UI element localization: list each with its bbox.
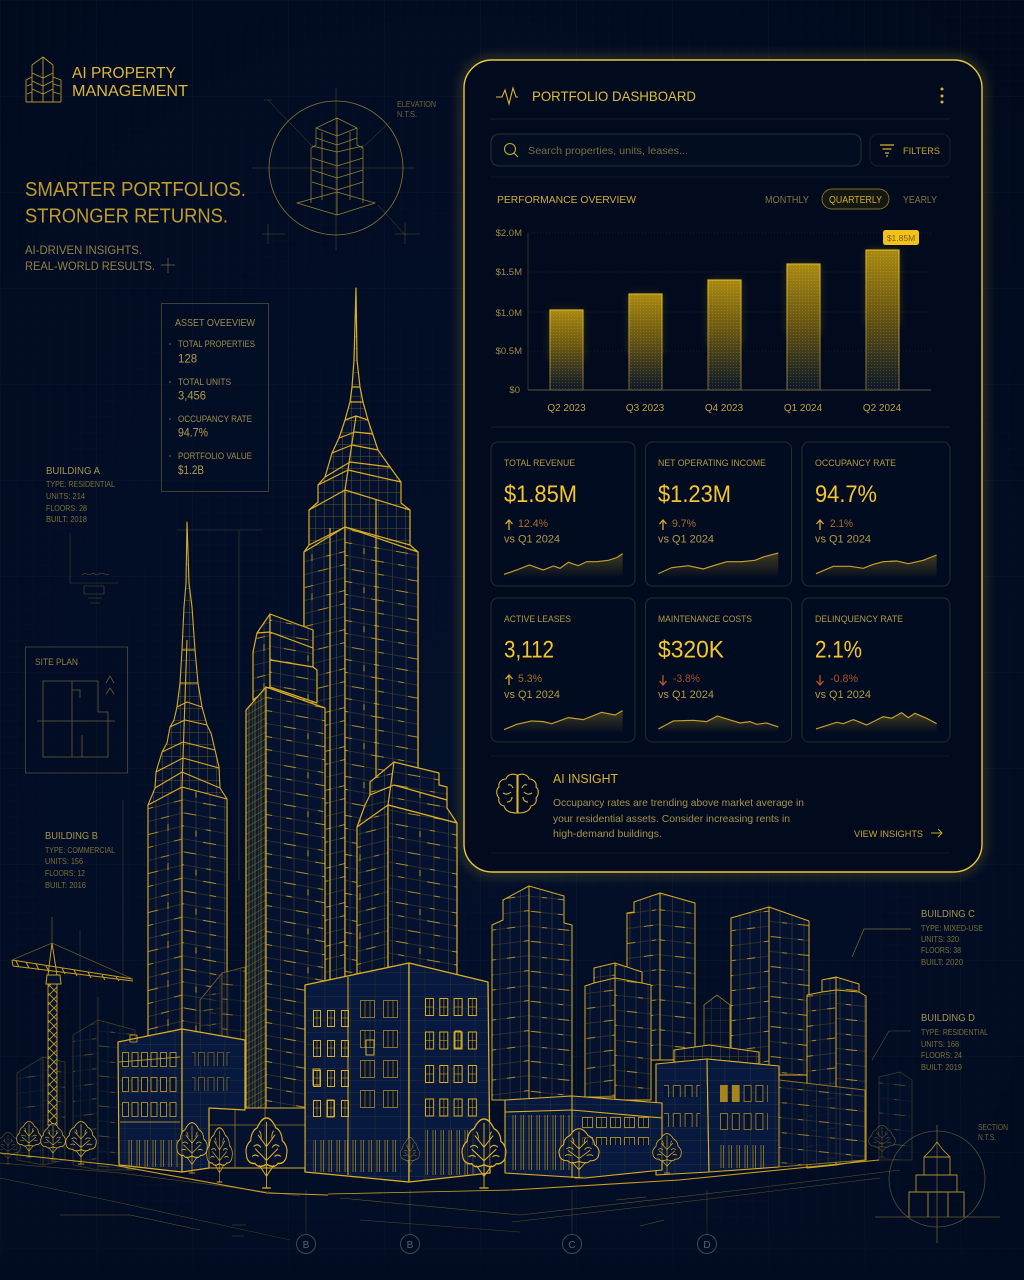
drafting guide lines [70,530,707,1234]
callout: building D: UNITS: 168 [921,1039,959,1049]
time range tabs: MONTHLY [765,195,809,206]
grid markers B B C D [296,1234,716,1254]
KPI card: total revenue: 12.4% [518,518,548,530]
building: low center block [305,963,490,1182]
panel: asset overview: TOTAL PROPERTIES [178,339,255,349]
AI insight section: AI INSIGHT [553,772,618,786]
KPI card: net operating income: NET OPERATING INCOME [658,458,766,469]
building: stepped sub tower [357,762,457,975]
KPI card: delinquency rate: -0.8% [830,673,858,685]
chart heading: PERFORMANCE OVERVIEW [497,194,636,206]
callout: building A: BUILDING A [46,465,100,477]
KPI card: maintenance costs: MAINTENANCE COSTS [658,614,752,625]
KPI card: total revenue: vs Q1 2024 [504,534,560,546]
KPI card: occupancy rate: OCCUPANCY RATE [815,458,896,469]
bar chart: Q2 2024 [863,403,902,414]
panel: asset overview [162,304,268,492]
AI insight section: Occupancy rates are trending above market average in [553,797,804,809]
logo wordmark: MANAGEMENT [72,83,188,100]
callout: building C: TYPE: MIXED-USE [921,923,983,933]
grid markers B B C D: B [303,1240,310,1251]
bottom fade [0,1215,1024,1280]
section label: SECTION [978,1123,1008,1132]
far left background buildings [17,997,135,1170]
KPI card: active leases: ACTIVE LEASES [504,614,571,625]
KPI card: total revenue: $1.85M [504,481,577,508]
KPI card: occupancy rate: 2.1% [830,518,853,530]
KPI card: maintenance costs: vs Q1 2024 [658,689,714,701]
time range tabs: QUARTERLY [829,195,882,206]
panel: site plan: SITE PLAN [35,657,78,667]
AI insight section [491,756,950,853]
bar chart: Q2 2023 [547,403,586,414]
building: main central tower [304,288,418,1000]
headline [25,179,246,228]
KPI card: delinquency rate [802,598,950,742]
far right faint building [879,1072,912,1160]
icon: construction crane [12,917,133,1125]
KPI card: delinquency rate: 2.1% [815,636,862,664]
bar chart [496,228,931,414]
callout: building C: FLOORS: 38 [921,945,961,955]
panel: asset overview: 128 [178,354,197,366]
callout: building A [46,465,115,524]
KPI card: active leases: 3,112 [504,636,554,664]
callout: building C: BUILDING C [921,908,975,920]
building: extension block [209,1108,305,1168]
KPI card: active leases [491,598,635,742]
bar chart: Q1 2024 [784,403,823,414]
search box [491,134,861,166]
KPI card: net operating income: vs Q1 2024 [658,534,714,546]
AI insight section: high-demand buildings. [553,828,662,840]
grid markers B B C D: B [407,1240,414,1251]
callout: building A: BUILT: 2018 [46,514,87,524]
KPI card: active leases: vs Q1 2024 [504,689,560,701]
panel: portfolio dashboard [464,60,982,872]
logo: building icon [26,57,61,102]
subheading: REAL-WORLD RESULTS. [25,259,155,273]
KPI card: occupancy rate: 94.7% [815,481,877,508]
callout: building A: UNITS: 214 [46,491,85,501]
icon: pulse [496,88,518,104]
bar chart: $1.5M [496,267,522,278]
KPI card: occupancy rate [802,442,950,586]
panel: asset overview: ASSET OVEEVIEW [175,317,255,329]
AI insight section: VIEW INSIGHTS [854,829,923,840]
callout: building B: BUILDING B [45,830,98,842]
KPI card: delinquency rate: vs Q1 2024 [815,689,871,701]
street and curb lines [0,1153,900,1240]
callout: building B: BUILT: 2016 [45,880,86,890]
bar chart: $2.0M [496,228,522,239]
panel: asset overview: TOTAL UNITS [178,377,231,387]
panel: asset overview: 3,456 [178,390,206,402]
callout: building B: FLOORS: 12 [45,868,85,878]
KPI card: maintenance costs: -3.8% [673,673,700,685]
icon: brain [497,774,538,813]
elevation label: N.T.S. [397,110,417,119]
section detail drawing [875,1125,1000,1243]
elevation label [397,100,436,119]
time range tabs [765,189,937,209]
callout: building D: BUILT: 2019 [921,1062,962,1072]
bar chart: $0 [509,385,520,396]
building: second tower [246,614,325,1110]
KPI card: active leases: 5.3% [518,673,542,685]
filters button [870,134,950,166]
KPI card: total revenue [491,442,635,586]
callout: building C: BUILT: 2020 [921,957,963,967]
grid markers B B C D: D [703,1240,711,1251]
section label: N.T.S. [978,1133,996,1142]
elevation label: ELEVATION [397,100,436,109]
subheading: AI-DRIVEN INSIGHTS. [25,243,142,257]
bar chart: $1.85M [887,233,915,243]
subheading [25,243,175,273]
building: low right block with rooftop [656,1045,779,1175]
callout: building A: FLOORS: 28 [46,503,87,513]
KPI card: total revenue: TOTAL REVENUE [504,458,575,469]
time range tabs: YEARLY [903,195,937,206]
callout: building C [852,908,983,967]
building: low right annex [779,1080,865,1167]
KPI card: net operating income: 9.7% [672,518,696,530]
callout: building B: TYPE: COMMERCIAL [45,845,115,855]
bar chart: $1.0M [496,308,522,319]
panel: asset overview: OCCUPANCY RATE [178,414,252,424]
panel: asset overview: PORTFOLIO VALUE [178,451,252,461]
headline: SMARTER PORTFOLIOS. [25,179,246,201]
panel: asset overview: 94.7% [178,428,208,440]
bar chart: Q4 2023 [705,403,744,414]
search box: Search properties, units, leases... [528,145,688,157]
KPI card: delinquency rate: DELINQUENCY RATE [815,614,903,625]
section label [978,1123,1008,1142]
KPI card: maintenance costs: $320K [658,636,724,664]
dashboard title: PORTFOLIO DASHBOARD [532,88,696,104]
icon: menu dots [940,88,944,104]
building: low left block [118,1029,245,1172]
callout: building B: UNITS: 156 [45,856,83,866]
headline: STRONGER RETURNS. [25,206,228,228]
callout: building D: TYPE: RESIDENTIAL [921,1027,988,1037]
building: low middle block [505,1096,662,1178]
callout: building A: TYPE: RESIDENTIAL [46,479,115,489]
bar chart: Q3 2023 [626,403,665,414]
panel: asset overview: $1.2B [178,465,204,477]
logo wordmark: AI PROPERTY [72,65,176,82]
KPI card: maintenance costs [646,598,792,742]
KPI card: net operating income: $1.23M [658,481,731,508]
trees [0,1118,895,1188]
right skyline towers [492,886,866,1168]
callout: building D: FLOORS: 24 [921,1050,962,1060]
logo wordmark [72,65,188,100]
KPI card: net operating income [646,442,792,586]
elevation detail drawing [252,88,420,250]
callout: building B [45,830,115,890]
filters button: FILTERS [903,146,940,157]
panel: site plan [26,647,128,773]
building: left spire tower [148,522,227,1040]
callout: building C: UNITS: 320 [921,934,959,944]
callout: building D [872,1012,988,1072]
building: small stepped block [200,967,245,1040]
bar chart: $0.5M [496,346,522,357]
callout: building D: BUILDING D [921,1012,975,1024]
grid markers B B C D: C [568,1240,576,1251]
AI insight section: your residential assets. Consider increasing rents in [553,813,790,825]
KPI card: occupancy rate: vs Q1 2024 [815,534,871,546]
